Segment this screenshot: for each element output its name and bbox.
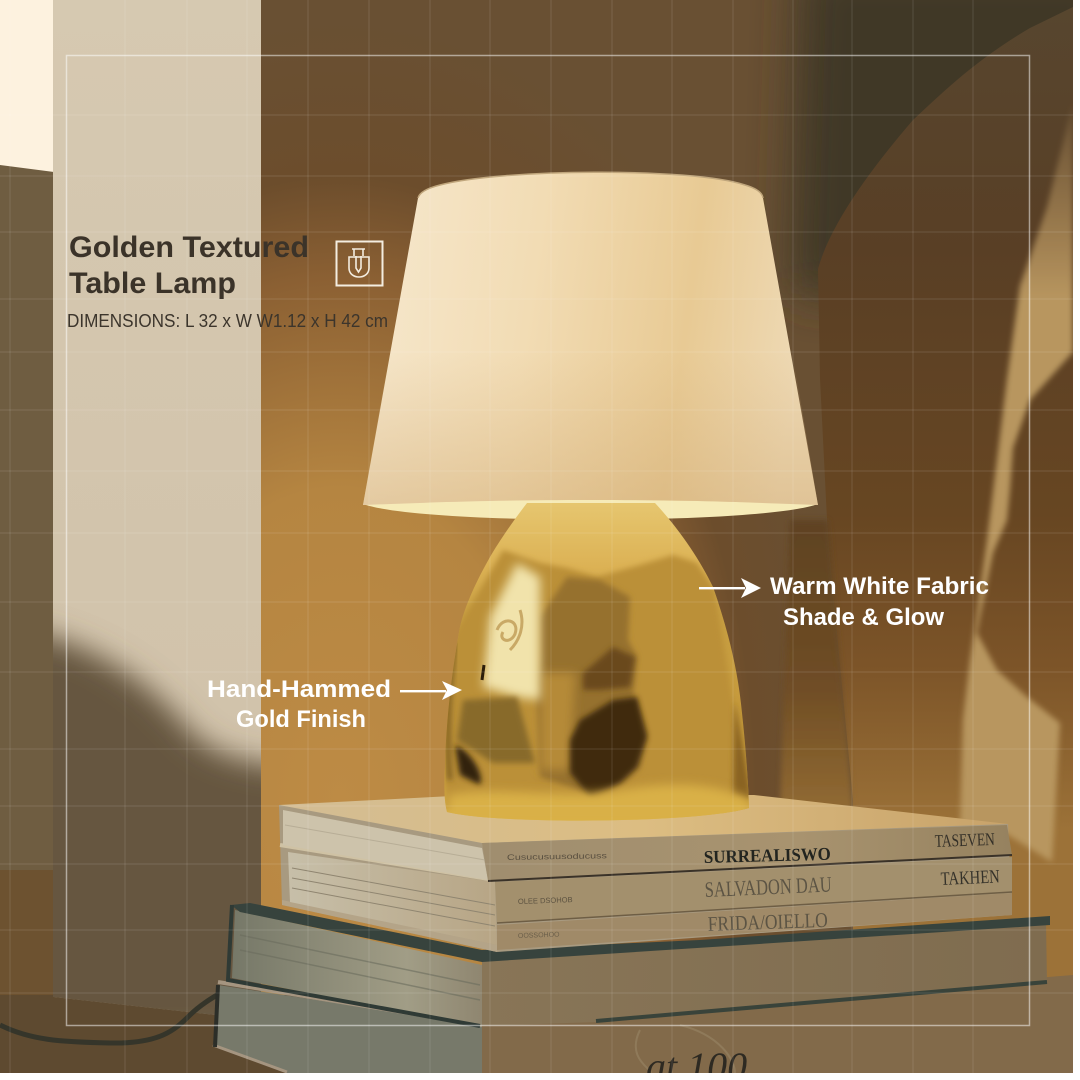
second book bbox=[280, 845, 1012, 945]
swirl motif bbox=[497, 610, 522, 650]
background wall bbox=[261, 0, 1080, 1073]
icon: lamp badge bbox=[336, 242, 382, 286]
title: Golden Textured bbox=[69, 231, 309, 264]
shadow on panel bbox=[53, 618, 261, 1015]
arrow bbox=[400, 681, 462, 700]
small label: OOSSOHOO bbox=[518, 932, 560, 940]
shade top rim bbox=[418, 172, 763, 198]
title: SURREALISWO: SURREALISWO bbox=[704, 844, 831, 867]
label bbox=[770, 573, 989, 631]
lamp base bbox=[444, 503, 752, 825]
label bbox=[207, 676, 391, 733]
label: Warm White Fabric bbox=[770, 573, 989, 600]
title bbox=[69, 231, 309, 300]
darkest patch bbox=[570, 697, 647, 797]
shade underside glow bbox=[363, 498, 818, 520]
light beam on curtain bbox=[960, 103, 1073, 862]
window light bbox=[0, 0, 54, 172]
title: SALVADON DAU: SALVADON DAU bbox=[704, 871, 832, 902]
label: Shade & Glow bbox=[783, 604, 944, 631]
curtain with light bbox=[780, 7, 1073, 1073]
title: Table Lamp bbox=[69, 267, 236, 300]
dimensions: DIMENSIONS: L 32 x W W1.12 x H 42 cm bbox=[67, 311, 388, 331]
callout: warm white fabric shade bbox=[699, 573, 989, 631]
base highlight bbox=[446, 785, 750, 825]
small label: OLEE DSOHOB bbox=[518, 895, 573, 906]
callout: hand-hammed gold finish bbox=[207, 676, 462, 733]
label: Hand-Hammed bbox=[207, 676, 391, 703]
left wall and window bbox=[0, 0, 330, 1073]
mid dark patch bbox=[583, 647, 635, 690]
third book pages and spine bbox=[282, 893, 1012, 952]
hammered shadow bbox=[537, 577, 647, 800]
title: FRIDA/OIELLO: FRIDA/OIELLO bbox=[707, 908, 828, 936]
right edge shade bbox=[730, 706, 748, 800]
lower left olive dents bbox=[457, 697, 535, 763]
bottom book bbox=[213, 975, 1073, 1080]
power cord bbox=[0, 992, 222, 1043]
arrow bbox=[699, 578, 761, 598]
label: Gold Finish bbox=[236, 706, 366, 733]
book stack backing bbox=[279, 805, 1012, 952]
top book bbox=[279, 795, 1012, 881]
body tone bbox=[445, 550, 750, 810]
book stack bbox=[213, 795, 1073, 1080]
lampshade bbox=[363, 172, 818, 505]
title: TAKHEN: TAKHEN bbox=[940, 866, 1000, 890]
highlight bbox=[483, 563, 540, 700]
small label: Cusucusuusoducuss bbox=[507, 851, 607, 862]
large dark book bbox=[228, 903, 1050, 1027]
lighter inner patch bbox=[540, 673, 575, 770]
title: TASEVEN: TASEVEN bbox=[934, 829, 995, 851]
